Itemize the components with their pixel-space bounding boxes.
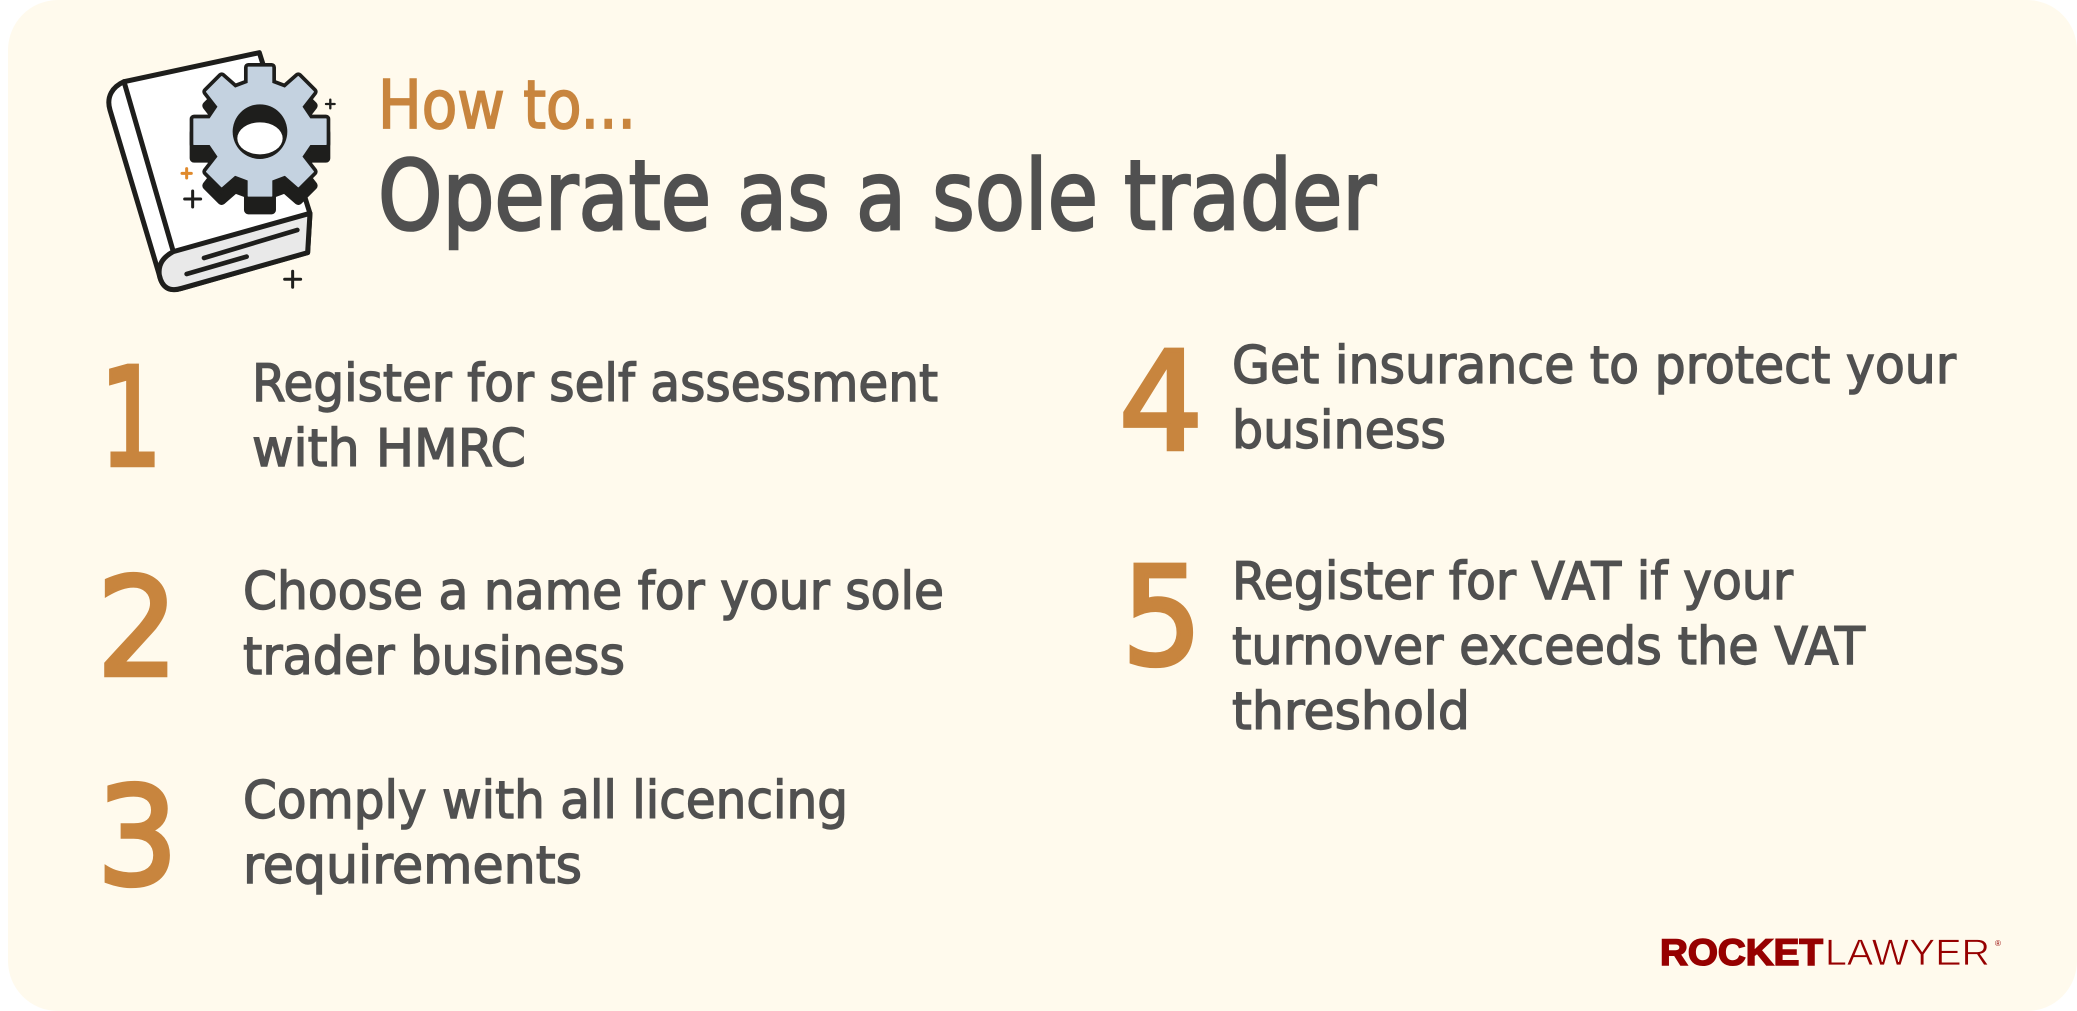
step 3 text: requirements [243, 836, 582, 896]
logo: Rocket Lawyer [1660, 932, 2001, 973]
icon: book with gear [109, 53, 335, 290]
step 4 text: Get insurance to protect your [1232, 336, 1957, 396]
number 1: 1 [100, 340, 162, 498]
number 5: 5 [1122, 539, 1202, 697]
logo: Rocket Lawyer: ® [1995, 939, 2001, 948]
step 2 text: trader business [243, 627, 625, 687]
step 5 text: turnover exceeds the VAT [1232, 617, 1865, 677]
step 1 text: with HMRC [252, 419, 526, 479]
step 1 [100, 340, 938, 498]
logo: Rocket Lawyer: ROCKET [1660, 932, 1823, 973]
step 5 text: Register for VAT if your [1232, 552, 1794, 612]
step 3 [97, 759, 848, 917]
step 2 [97, 550, 944, 708]
step 5 [1122, 539, 1865, 742]
logo: Rocket Lawyer: LAWYER [1825, 932, 1990, 973]
title: Operate as a sole trader: Operate as a sole trader [378, 140, 1376, 252]
heading: How to...: How to... [378, 66, 636, 144]
step 2 text: Choose a name for your sole [243, 562, 944, 622]
step 1 text: Register for self assessment [252, 354, 938, 414]
step 4 text: business [1232, 401, 1446, 461]
number 4: 4 [1119, 324, 1203, 482]
step 5 text: threshold [1232, 682, 1470, 742]
number 3: 3 [97, 759, 178, 917]
number 2: 2 [97, 550, 178, 708]
step 4 [1119, 324, 1957, 482]
step 3 text: Comply with all licencing [243, 771, 848, 831]
